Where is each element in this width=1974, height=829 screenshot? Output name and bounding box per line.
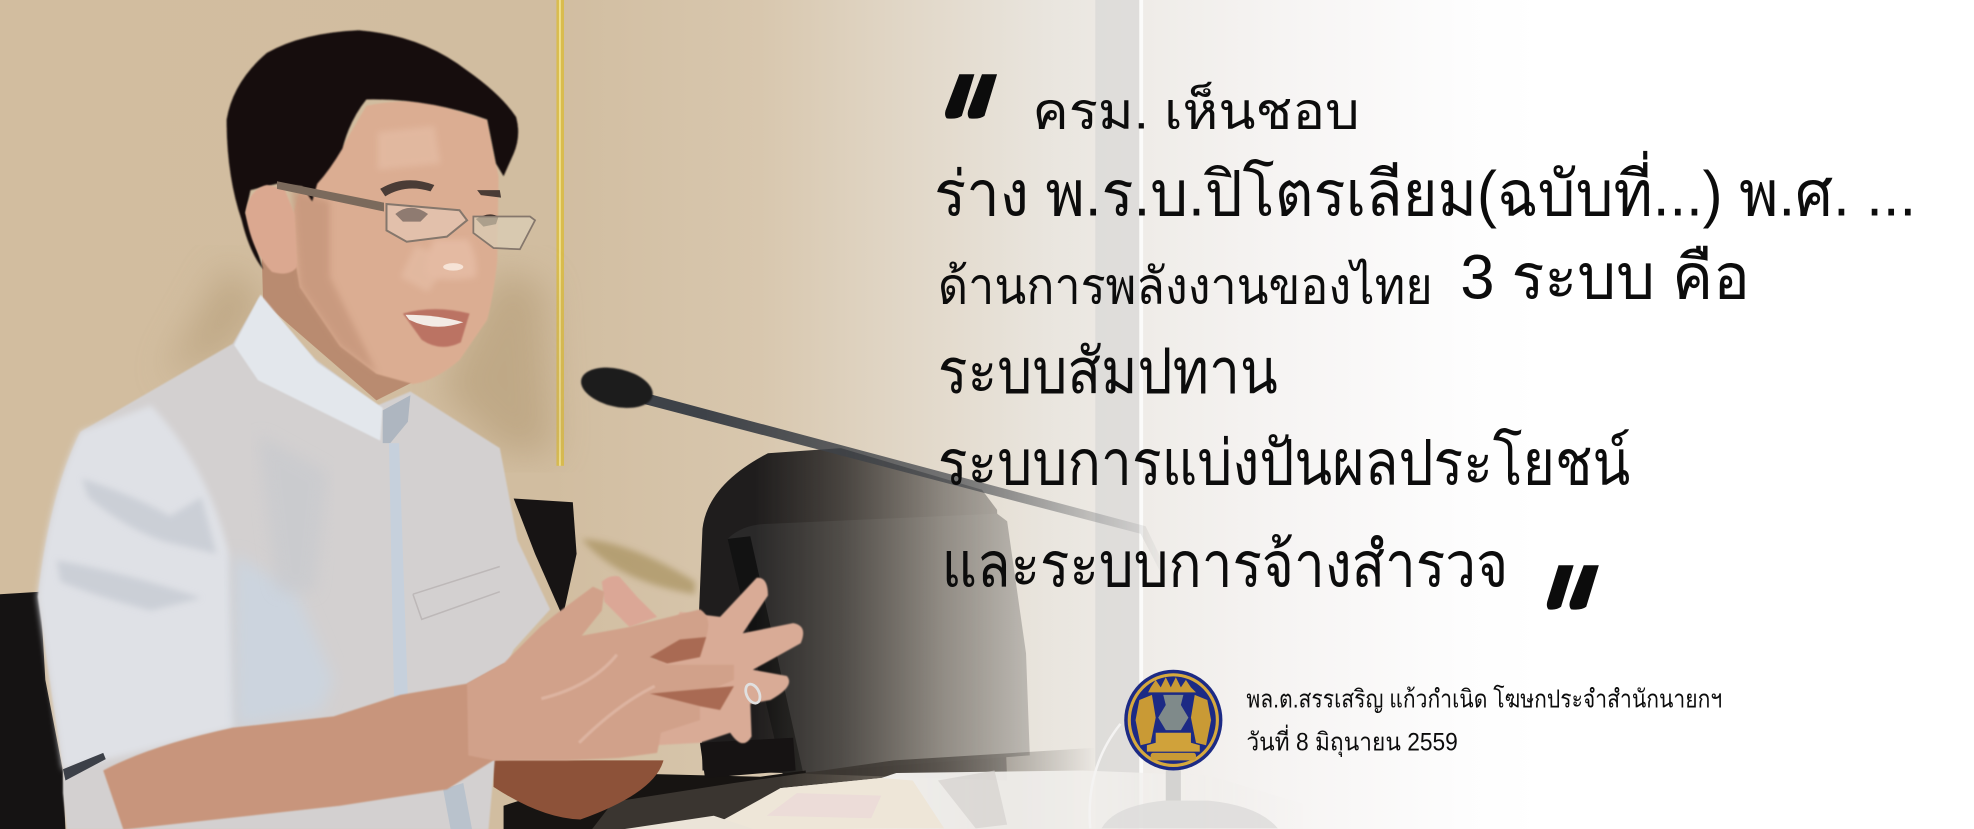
front hand and fingers — [467, 587, 734, 760]
left lens — [386, 204, 467, 242]
main paper sheet — [776, 770, 1143, 829]
pink document — [767, 793, 881, 818]
chest sheen — [258, 434, 327, 592]
sleeve folds — [57, 478, 217, 611]
base — [1102, 801, 1278, 828]
sleeve panel — [38, 405, 234, 769]
chair leg shadow under hand — [700, 738, 796, 778]
teeth — [405, 315, 463, 327]
eyes — [395, 208, 499, 227]
desk dark underside — [504, 770, 806, 829]
seal emblem: right lion — [1191, 695, 1211, 745]
lower shirt shade — [443, 783, 472, 829]
line 4: ระบบสัมปทาน — [938, 337, 1278, 407]
microphone — [580, 366, 1157, 564]
cable arc — [1090, 724, 1120, 828]
microphone head — [577, 361, 657, 414]
shirt body and sleeve — [38, 297, 550, 829]
spokesperson name: พล.ต.สรรเสริญ แก้วกำเนิด โฆษกประจำสำนักนายกฯ — [1246, 685, 1722, 714]
brown shadowed forearm behind — [494, 760, 663, 820]
palm shadow gaps — [650, 637, 734, 710]
nose highlight — [443, 263, 463, 271]
pocket line — [413, 567, 500, 619]
wall shadow behind the speaker — [164, 264, 554, 453]
back hand palm and fingers — [648, 578, 803, 745]
desk top surface — [592, 748, 1095, 829]
temple arm — [277, 181, 384, 211]
veins highlight — [541, 655, 655, 743]
side panel blue sheen — [234, 554, 334, 728]
pale vertical window band — [1095, 0, 1143, 829]
quote text block — [934, 74, 1916, 610]
forearm — [103, 663, 592, 829]
right lens — [473, 217, 535, 249]
seal gold ring — [1129, 675, 1217, 765]
lips — [403, 309, 470, 347]
speaker in silver Thai shirt — [38, 30, 803, 829]
papers on desk — [776, 770, 1143, 829]
microphone stem — [644, 394, 1157, 564]
opening quote marks — [945, 74, 997, 119]
glasses — [277, 181, 535, 249]
neck opening — [383, 395, 410, 443]
closing quote marks — [1547, 565, 1599, 610]
line 1: ครม. เห็นชอบ — [1032, 81, 1360, 139]
upper thumb — [602, 576, 657, 627]
neck — [262, 258, 422, 400]
seal emblem: altar base — [1147, 733, 1200, 752]
line 5: ระบบการแบ่งปันผลประโยชน์ — [938, 428, 1630, 499]
face — [290, 101, 499, 384]
seal emblem: lower inscription — [1151, 753, 1196, 760]
chair left foreground — [0, 592, 65, 829]
collar — [234, 295, 383, 441]
seal emblem: central urn — [1158, 695, 1188, 730]
beige sheet — [724, 778, 944, 829]
ear — [245, 185, 297, 274]
line 2: ร่าง พ.ร.บ.ปิโตรเลียม(ฉบับที่...) พ.ศ. ... — [934, 150, 1916, 229]
left paper strip — [621, 816, 755, 829]
sleeve hem shadow — [63, 753, 106, 781]
eyebrows — [380, 180, 501, 198]
chair behind shoulder — [514, 499, 577, 617]
line 6: และระบบการจ้างสำรวจ — [942, 531, 1508, 601]
line 3 lead: ด้านการพลังงานของไทย — [938, 257, 1433, 314]
front chair side rim — [728, 536, 803, 775]
microphone cable and base — [1090, 724, 1278, 828]
seal emblem: flame crest — [1148, 677, 1196, 692]
government seal — [1124, 670, 1222, 770]
placket — [389, 443, 408, 699]
seal outer ring — [1124, 670, 1222, 770]
gold wall strip — [556, 0, 564, 466]
chair shadow on wall — [582, 539, 695, 594]
desk — [504, 748, 1095, 829]
nose — [426, 239, 476, 279]
front chair — [728, 514, 1030, 773]
seal emblem: left lion — [1136, 695, 1156, 745]
hair — [227, 30, 518, 269]
face shade — [292, 189, 378, 374]
ring — [743, 682, 763, 705]
attribution — [1246, 685, 1722, 757]
back chair — [699, 448, 1007, 781]
line 3 emphasis: 3 ระบบ คือ — [1460, 242, 1750, 312]
date: วันที่ 8 มิถุนายน 2559 — [1246, 724, 1458, 757]
fading conference chairs — [699, 448, 1030, 781]
face gloss — [378, 126, 451, 292]
paper fold shade — [938, 770, 1007, 828]
stand post — [1166, 755, 1181, 801]
